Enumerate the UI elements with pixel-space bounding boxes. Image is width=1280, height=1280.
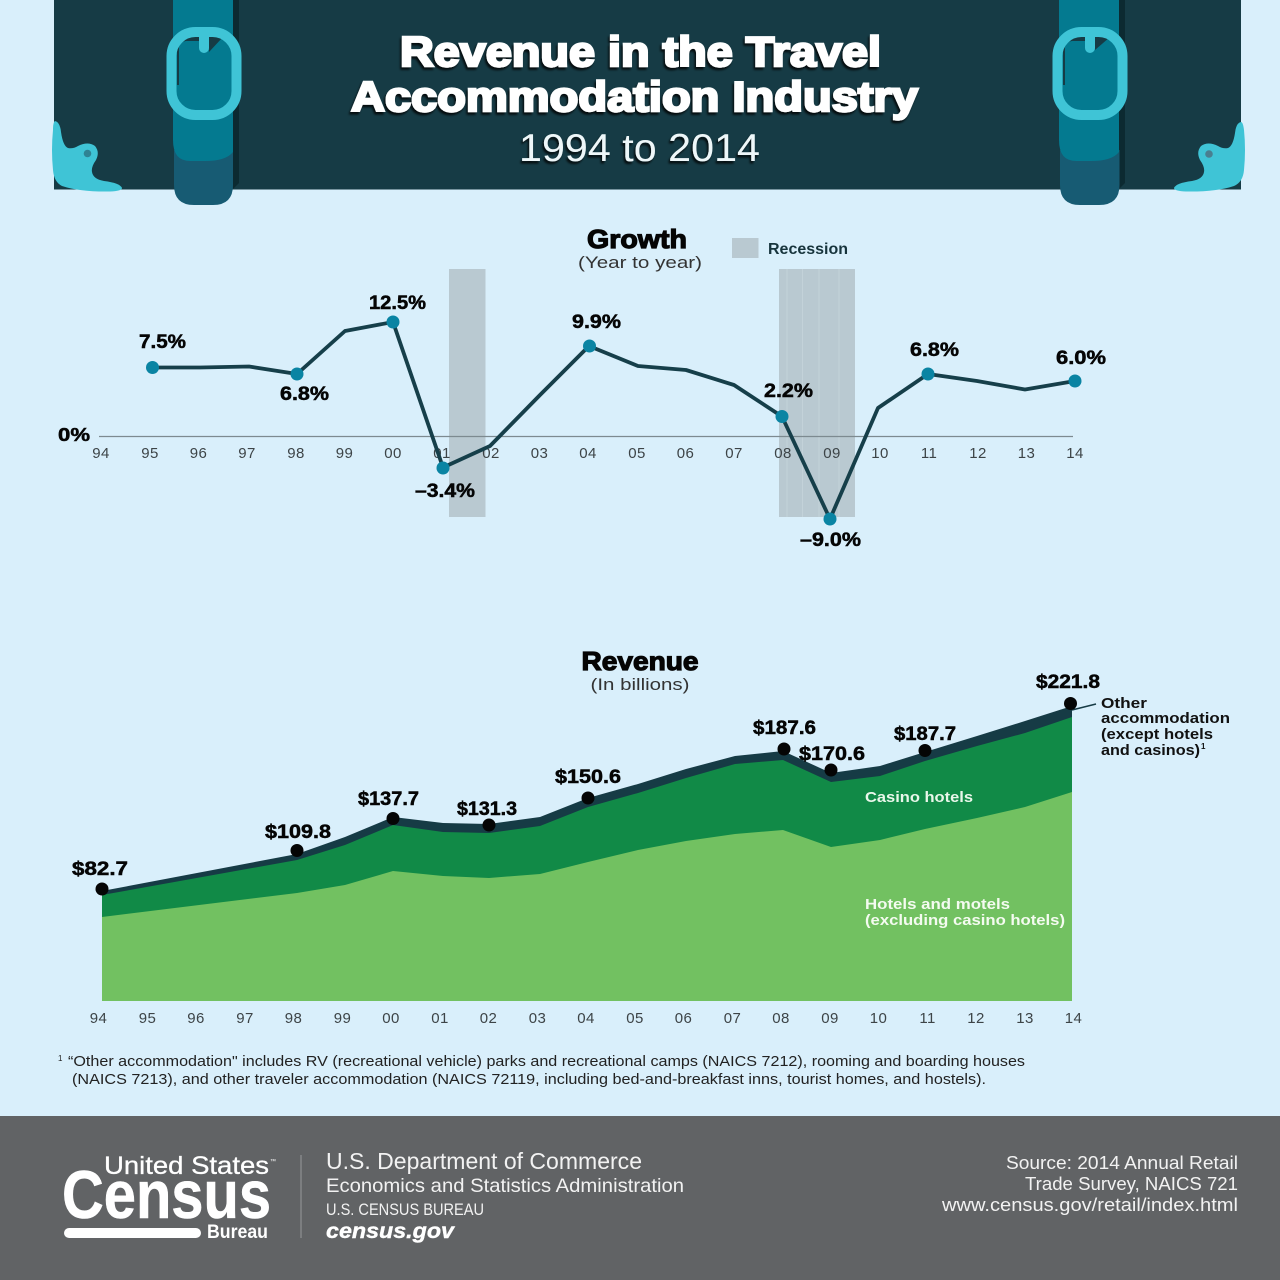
label: other accommodation: accommodation xyxy=(1101,710,1230,727)
chart: growth line xyxy=(58,269,1106,551)
year axis labels: 08 xyxy=(772,1010,790,1027)
agency text: census.gov xyxy=(326,1220,455,1243)
recession band 2001 xyxy=(449,269,486,517)
icon: right strap and buckle xyxy=(1058,0,1125,205)
icon: left strap and buckle xyxy=(172,0,239,205)
year axis labels: 03 xyxy=(531,445,548,462)
source text: Trade Survey, NAICS 721 xyxy=(1025,1174,1238,1194)
year axis labels: 03 xyxy=(529,1010,546,1027)
source text: Source: 2014 Annual Retail xyxy=(1006,1153,1238,1173)
year axis labels: 09 xyxy=(823,445,841,462)
markers xyxy=(96,697,1077,896)
year axis labels: 10 xyxy=(870,1010,887,1027)
data points xyxy=(146,316,1082,526)
year axis labels: 10 xyxy=(871,445,889,462)
year axis labels: 96 xyxy=(187,1010,205,1027)
icon: right corner protector xyxy=(1174,122,1245,192)
label: other accommodation xyxy=(1101,695,1230,759)
year axis labels: 09 xyxy=(821,1010,839,1027)
footnote: 1 xyxy=(58,1054,63,1063)
agency text xyxy=(326,1148,684,1243)
year axis labels: 01 xyxy=(431,1010,449,1027)
values xyxy=(72,672,1100,880)
heading: Revenue: Revenue xyxy=(582,646,698,676)
label: hotels and motels: Hotels and motels xyxy=(865,896,1010,913)
footnote: “Other accommodation" includes RV (recreational vehicle) parks and recreational camps (NAICS 7212), rooming and boarding houses xyxy=(68,1053,1025,1070)
logo: Census Bureau: United States xyxy=(104,1152,269,1180)
chart: revenue stacked area xyxy=(72,672,1230,1027)
data values: 7.5% xyxy=(139,332,186,353)
year axis labels: 07 xyxy=(725,445,743,462)
area: other accommodation xyxy=(102,706,1072,950)
data values: –3.4% xyxy=(415,481,475,502)
heading: Revenue xyxy=(582,646,698,694)
footnote: (NAICS 7213), and other traveler accommodation (NAICS 72119, including bed-and-breakfast inns, tourist homes, and hostels). xyxy=(72,1071,986,1088)
heading: Growth: (Year to year) xyxy=(578,253,702,272)
year axis labels: 94 xyxy=(92,445,110,462)
values: $187.7 xyxy=(894,724,956,745)
year axis labels: 95 xyxy=(141,445,159,462)
data values: 12.5% xyxy=(369,293,426,314)
year axis labels: 95 xyxy=(139,1010,156,1027)
year axis labels: 06 xyxy=(675,1010,692,1027)
year axis labels xyxy=(90,1010,1082,1027)
year axis labels: 05 xyxy=(628,445,646,462)
data values: 6.8% xyxy=(910,340,959,361)
year axis labels: 13 xyxy=(1018,445,1035,462)
area: hotels and motels xyxy=(102,792,1072,1001)
values: $82.7 xyxy=(72,859,128,880)
growth polyline xyxy=(152,322,1075,519)
year axis labels: 97 xyxy=(236,1010,254,1027)
leader line xyxy=(1072,704,1096,710)
logo: Census Bureau: Census xyxy=(62,1157,271,1233)
legend: recession xyxy=(732,238,848,258)
panel: footer xyxy=(0,1116,1280,1280)
area: casino hotels xyxy=(102,717,1072,950)
label: other accommodation: and casinos) xyxy=(1101,742,1200,759)
agency text: U.S. Department of Commerce xyxy=(326,1148,642,1174)
source text: www.census.gov/retail/index.html xyxy=(941,1195,1238,1215)
agency text: U.S. CENSUS BUREAU xyxy=(326,1201,484,1219)
heading: Growth: Growth xyxy=(587,224,687,254)
year axis labels: 04 xyxy=(577,1010,595,1027)
title: Revenue in the Travel xyxy=(400,28,881,75)
values: $170.6 xyxy=(799,744,865,765)
data values: –9.0% xyxy=(800,530,861,551)
year axis labels xyxy=(92,445,1084,462)
data values: 6.0% xyxy=(1056,348,1106,369)
year axis labels: 02 xyxy=(482,445,500,462)
title: Accommodation Industry xyxy=(351,73,919,120)
values: $131.3 xyxy=(457,799,517,820)
footnote xyxy=(58,1053,1025,1088)
agency text: Economics and Statistics Administration xyxy=(326,1175,684,1197)
year axis labels: 13 xyxy=(1016,1010,1034,1027)
label: hotels and motels: (excluding casino hotels) xyxy=(865,912,1065,929)
label: hotels and motels xyxy=(865,896,1065,929)
data values: 2.2% xyxy=(764,381,813,402)
year axis labels: 12 xyxy=(967,1010,985,1027)
legend: recession: Recession xyxy=(768,241,848,258)
heading: Revenue: (In billions) xyxy=(590,675,690,694)
year axis labels: 99 xyxy=(334,1010,351,1027)
year axis labels: 12 xyxy=(969,445,987,462)
source text xyxy=(941,1153,1238,1215)
subtitle: years: 1994 to 2014 xyxy=(519,127,760,170)
logo: Census Bureau: Bureau xyxy=(207,1222,268,1243)
year axis labels: 97 xyxy=(238,445,256,462)
data values xyxy=(139,293,1106,551)
heading: Growth xyxy=(578,224,702,272)
title xyxy=(351,28,919,120)
icon: left corner protector xyxy=(52,121,122,192)
label: other accommodation: (except hotels xyxy=(1101,726,1213,743)
label: other accommodation: Other xyxy=(1101,695,1147,712)
year axis labels: 98 xyxy=(287,445,305,462)
year axis labels: 14 xyxy=(1066,445,1084,462)
values: $221.8 xyxy=(1036,672,1100,693)
logo: Census Bureau: ™ xyxy=(270,1158,276,1165)
year axis labels: 94 xyxy=(90,1010,107,1027)
year axis labels: 99 xyxy=(336,445,353,462)
panel: suitcase header xyxy=(52,0,1245,205)
label: casino hotels: Casino hotels xyxy=(865,789,973,806)
year axis labels: 05 xyxy=(626,1010,644,1027)
year axis labels: 00 xyxy=(384,445,402,462)
year axis labels: 14 xyxy=(1065,1010,1082,1027)
year axis labels: 96 xyxy=(190,445,207,462)
values: $187.6 xyxy=(753,718,816,739)
values: $137.7 xyxy=(358,789,419,810)
year axis labels: 06 xyxy=(677,445,694,462)
year axis labels: 08 xyxy=(774,445,792,462)
year axis labels: 98 xyxy=(285,1010,302,1027)
zero label: 0% xyxy=(58,425,90,445)
values: $150.6 xyxy=(555,767,621,788)
year axis labels: 07 xyxy=(724,1010,741,1027)
year axis labels: 11 xyxy=(919,1010,936,1027)
label: other accommodation: 1 xyxy=(1201,742,1206,751)
data values: 9.9% xyxy=(572,312,621,333)
year axis labels: 02 xyxy=(480,1010,497,1027)
year axis labels: 11 xyxy=(921,445,937,462)
data values: 6.8% xyxy=(280,384,329,405)
year axis labels: 00 xyxy=(382,1010,400,1027)
values: $109.8 xyxy=(265,822,331,843)
recession band 2008-09 xyxy=(779,269,855,517)
year axis labels: 01 xyxy=(433,445,451,462)
year axis labels: 04 xyxy=(579,445,597,462)
